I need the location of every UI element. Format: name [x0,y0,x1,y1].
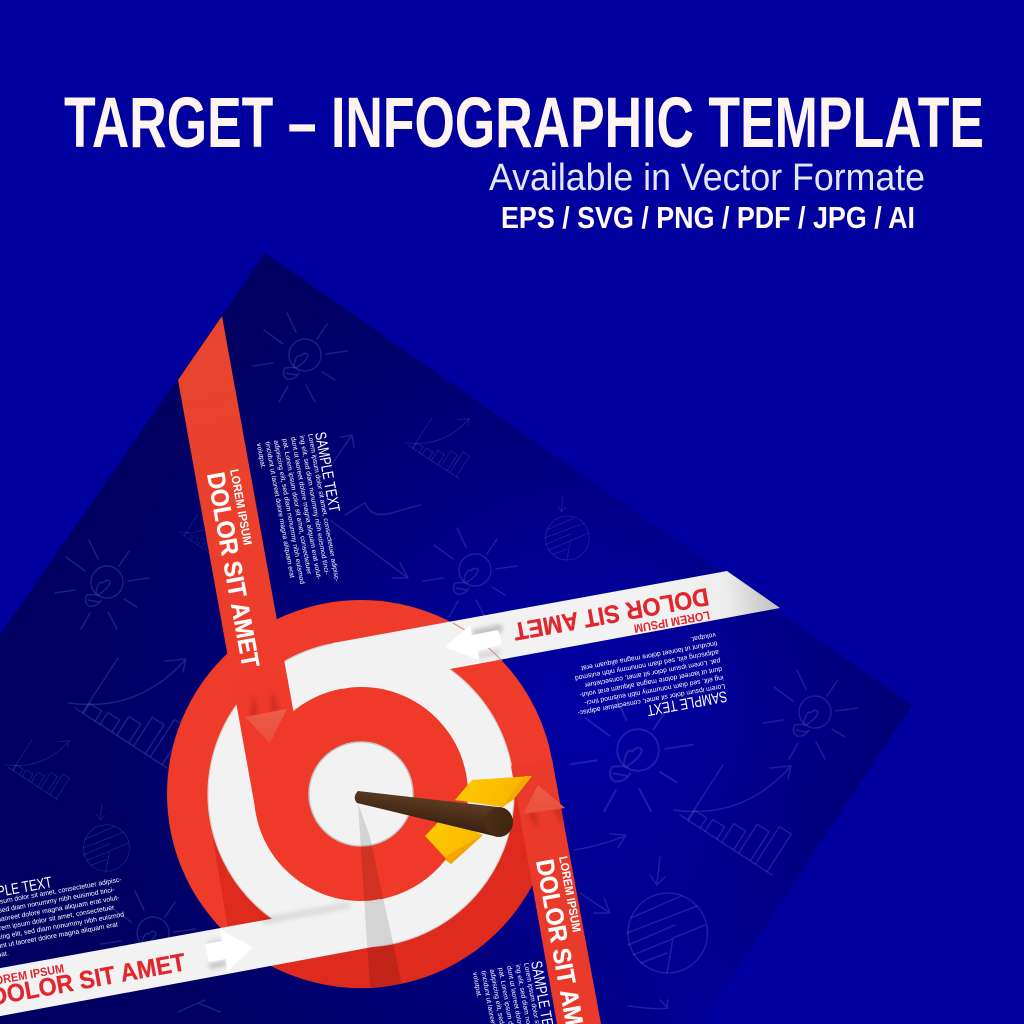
yellow upper vane [455,776,532,807]
label small: LOREM IPSUM [633,608,711,636]
soft shadow above lower white ribbon [262,903,350,923]
outer red ring [167,600,555,988]
paragraph: volutpat. [690,631,716,642]
text block: right ribbon sample text [567,631,728,731]
doodle: light bulb top [253,313,347,402]
ribbon label: lower left white [0,948,188,1012]
doodle: loose arrows and squiggles [178,435,668,1012]
paragraph: ing elit, sed diam nonummy nibh euismod tinci- [584,674,724,706]
arrow shadow on the board [358,803,402,987]
ribbon label: top right white [511,582,711,645]
doodle: small chart near ribbon [178,514,225,558]
paragraph [0,876,132,962]
sample heading: SAMPLE TEXT [645,687,728,718]
inner red ring [254,687,468,901]
ribbon label: top left red [201,468,264,670]
paragraph: volutpat. [471,972,482,998]
paragraph: Lorem ipsum dolor sit amet, consectetuer adipisc- [577,682,726,716]
shaft end [485,807,513,837]
paragraph: tincidunt ut laoreet dolore magna aliquam erat [580,639,718,671]
ribbon arrow: top right white [445,624,502,660]
doodle: pie middle [545,496,589,560]
sample heading: SAMPLE TEXT [311,431,342,514]
arrow stuck in the target [355,776,532,864]
doodle: light bulb lower left [101,891,195,980]
wooden shaft [355,791,498,837]
doodle: light bulb centre [570,695,693,811]
doodle: light bulb right [763,670,857,759]
background doodles [5,313,857,1012]
ribbon arrow: lower right red [523,785,565,830]
text block: lower right sample text [471,960,571,1024]
doodle: small chart top [405,418,470,478]
doodle: light bulb middle [423,528,517,617]
paragraph: adipiscing elit, sed diam nonummy nibh euismod [272,440,305,585]
lower vane shaded edge [445,835,483,864]
red ribbon from lower right [511,759,601,1024]
doodle: light bulb left [55,540,149,629]
darker lower section of the outer ring [213,796,532,988]
subtitle: Available in Vector Formate [489,157,925,199]
paragraph: Lorem ipsum dolor sit amet, consectetuer adipisc- [306,433,340,582]
paragraph: volutpat. [255,443,266,469]
label small: LOREM IPSUM [227,468,255,546]
doodle: growth chart right [674,765,791,875]
ribbon arrow: top left red [245,690,287,743]
paragraph [471,962,556,1024]
paragraph: pat. Lorem ipsum dolor sit amet, consectetuer [280,438,312,576]
doodle: growth chart left [69,658,186,768]
paragraph [255,433,340,592]
label large: DOLOR SIT AMET [201,470,264,670]
text block: top ribbon sample text [255,431,355,592]
red ribbon from top left [178,316,310,813]
paragraph [567,631,726,716]
paragraph: ing elit, sed diam nonummy nibh euismod tinci- [298,435,330,575]
ribbon arrow: lower left white [205,930,253,972]
text block: lower left sample text [0,862,132,962]
dark rotated panel [0,253,912,1024]
paragraph: adipiscing elit, sed diam nonummy nibh euismod [574,648,719,681]
label small: LOREM IPSUM [556,855,584,933]
label large: DOLOR SIT AMET [511,582,711,645]
yellow lower vane [425,817,483,864]
thin outer ring line over ribbon [453,623,502,661]
paragraph: pat. Lorem ipsum dolor sit amet, consectetuer [583,656,721,688]
file formats line: EPS / SVG / PNG / PDF / JPG / AI [501,200,915,235]
ribbon label: lower right red [530,855,593,1024]
paragraph: dunt ut laoreet dolore magna aliquam erat volut- [579,665,722,698]
white ribbon from top right [330,571,780,689]
doodle: pie lower right [627,857,707,973]
centre white circle [309,742,413,846]
paragraph: dunt ut laoreet dolore magna aliquam erat volut- [289,437,322,580]
paragraph: tincidunt ut laoreet dolore magna aliquam erat [263,441,295,579]
white ring [208,641,514,947]
doodle: small chart left [5,740,70,800]
upper vane shaded edge [505,776,532,802]
target board [0,316,780,1024]
white ribbon from lower left [0,899,389,1018]
doodle: pie left [83,804,129,871]
